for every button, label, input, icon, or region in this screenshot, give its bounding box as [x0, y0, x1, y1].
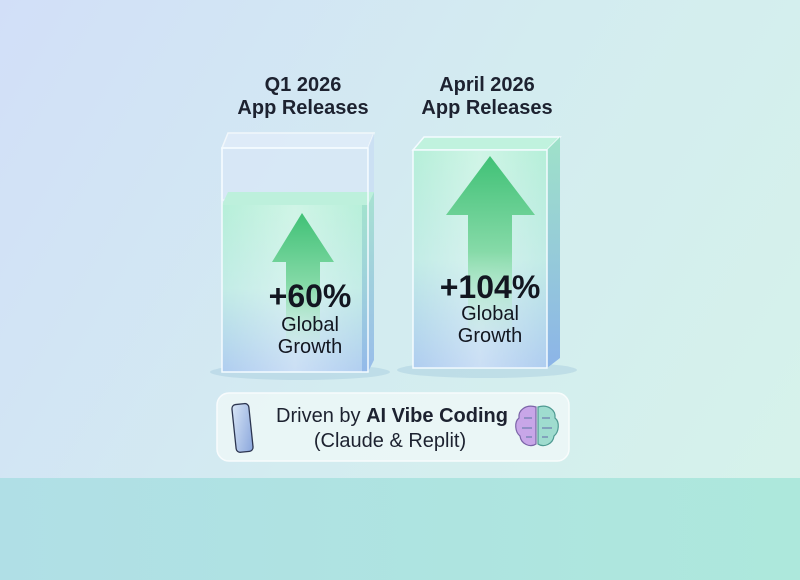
value: +60%: Growth: [278, 336, 342, 358]
arrow: April: [446, 156, 535, 330]
callout text: [276, 405, 508, 452]
heading: Q1 2026: [237, 74, 369, 119]
value: +104%: Growth: [458, 325, 522, 347]
callout text: Driven by AI Vibe Coding: [276, 405, 508, 427]
heading: April 2026: April 2026: [439, 74, 535, 96]
icon: brain: [516, 406, 558, 446]
bar: Q1 box: [210, 133, 390, 380]
value: +104%: Global: [461, 303, 519, 325]
heading: Q1 2026: Q1 2026: [265, 74, 341, 96]
bottom strip: [0, 478, 800, 580]
bar: April box: [397, 137, 577, 378]
callout: driven by: [217, 393, 569, 461]
heading: Q1 2026: App Releases: [237, 97, 369, 119]
value: +60%: Global: [281, 314, 339, 336]
value: +60%: [269, 278, 351, 358]
value: +104%: [440, 269, 540, 347]
heading: April 2026: [421, 74, 553, 119]
value: +60%: +60%: [269, 278, 351, 314]
arrow: Q1: [272, 213, 334, 345]
heading: April 2026: App Releases: [421, 97, 553, 119]
icon: phone: [232, 403, 253, 453]
callout text: (Claude & Replit): [314, 430, 466, 452]
value: +104%: +104%: [440, 269, 540, 305]
